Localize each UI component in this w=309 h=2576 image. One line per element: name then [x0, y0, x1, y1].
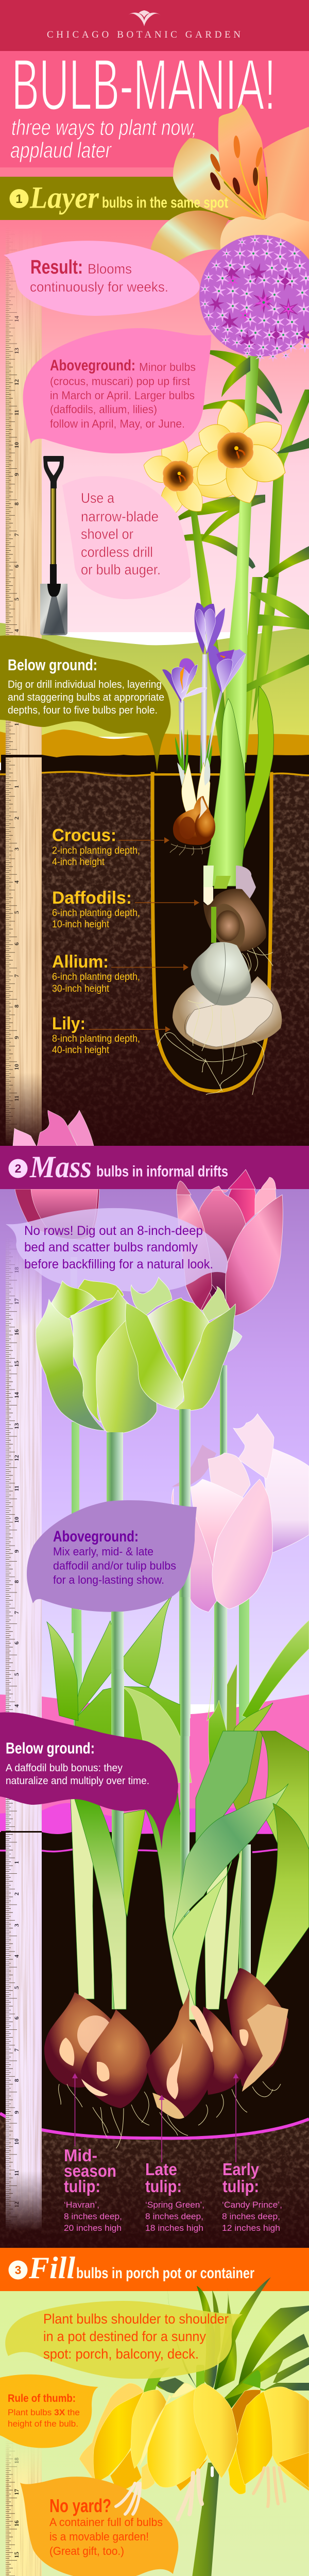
section 2 ruler: 14	[13, 1392, 20, 1398]
soil strip	[1, 755, 309, 776]
label: late tulip: 18 inches high	[145, 2223, 203, 2233]
section 2 ruler: 11	[13, 2170, 20, 2176]
callout: aboveground section 2	[27, 1500, 197, 1612]
icon: number 1	[9, 189, 29, 208]
callout: tools: or bulb auger.	[81, 562, 161, 578]
ruler: section 1: 9	[13, 473, 20, 476]
section 2 ruler: 6	[13, 2016, 20, 2020]
depth label: daffodils: 10-inch height	[52, 919, 110, 930]
daffodil flowers	[140, 399, 292, 519]
depth label: daffodils: Daffodils:	[52, 888, 132, 908]
section 2 ruler: 16	[13, 1329, 20, 1335]
section 2 ruler	[6, 1236, 42, 2231]
callout: aboveground section 1: (crocus, muscari) pop up first	[50, 375, 190, 387]
tulip: pink	[177, 1170, 283, 1316]
section 3 heading	[8, 2251, 254, 2285]
fritillaria bells	[79, 2383, 309, 2494]
callout: tools: Use a	[81, 490, 115, 506]
section 2 ruler: 18	[13, 1267, 20, 1273]
callout: rule of thumb: height of the bulb.	[8, 2419, 78, 2429]
callout: aboveground section 1: (daffodils, allium, lilies)	[50, 403, 157, 416]
ruler: section 1: 5	[13, 911, 20, 914]
crocus plants	[162, 603, 246, 824]
soil bowl	[0, 1831, 309, 2138]
callout: rule of thumb: Plant bulbs 3X the	[8, 2408, 80, 2417]
section 2 ruler: 10	[13, 2139, 20, 2145]
icon: number 2: 2	[15, 1162, 21, 1175]
section 2 ruler: 17	[13, 1298, 20, 1304]
section 2 ruler: 4	[13, 1955, 20, 1958]
callout: plant bulbs: in a pot destined for a sunny	[43, 2329, 206, 2344]
label: mid-season tulip: ‘Havran’,	[64, 2200, 99, 2210]
tulip: green left	[36, 1279, 157, 1433]
section 2 ruler: 10	[13, 1517, 20, 1523]
section 2 heading: bulbs in informal drifts	[96, 1163, 228, 1180]
tulip foliage	[47, 1594, 309, 1999]
section 1 header band	[0, 177, 309, 220]
allium flower head	[199, 234, 309, 362]
callout: below ground section 1: depths, four to five bulbs per hole.	[8, 705, 158, 716]
section 2 ruler: 7	[13, 1611, 20, 1614]
ground line on ruler 2	[1, 1831, 42, 1850]
ruler: section 1: 14	[13, 316, 20, 322]
section 2 ruler: 1	[13, 1861, 20, 1864]
fritillaria stamens	[178, 2468, 285, 2519]
callout: rule of thumb: Rule of thumb:	[8, 2393, 76, 2404]
section 3 ruler: 18	[13, 2458, 20, 2464]
stems crossing the callout	[111, 1597, 190, 1803]
callout: no rows: bed and scatter bulbs randomly	[24, 1240, 198, 1255]
depth label: daffodils: 6-inch planting depth,	[52, 908, 140, 919]
section 1 heading: Layer	[29, 180, 99, 214]
callout: no yard: (Great gift, too.)	[49, 2545, 124, 2557]
section 2 ruler: 8	[13, 2079, 20, 2082]
section 2 ruler: 7	[13, 2048, 20, 2052]
callout: aboveground section 2: Aboveground:	[53, 1528, 139, 1545]
tulip labels and pointers	[64, 2073, 282, 2233]
depth label: daffodils	[52, 888, 199, 930]
stems and leaves: layered planting	[165, 350, 309, 886]
callout: aboveground section 2: Mix early, mid- & late	[53, 1545, 153, 1558]
planting hole	[152, 774, 271, 1091]
bulb roots: lily and allium	[157, 1001, 264, 1095]
ruler: section 1: 12	[13, 379, 20, 385]
label: late tulip: 8 inches deep,	[145, 2211, 203, 2222]
label: early tulip: 12 inches high	[222, 2223, 280, 2233]
callout: tools: cordless drill	[81, 544, 153, 560]
crocus bloom: upper	[195, 603, 225, 654]
callout: plant bulbs: Plant bulbs shoulder to shoulder	[43, 2311, 229, 2327]
ruler: section 1: 13	[13, 348, 20, 354]
section 2 ruler: 12	[13, 1455, 20, 1461]
callout: no rows	[6, 1208, 228, 1292]
lily flower	[151, 104, 309, 273]
crocus bloom: right	[209, 646, 246, 693]
section 2 ruler: 11	[13, 1485, 20, 1492]
underground leaves	[75, 1731, 309, 2020]
section 2 ruler: 9	[13, 1550, 20, 1553]
label: late tulip: ‘Spring Green’,	[145, 2200, 204, 2210]
section 3 heading: bulbs in porch pot or container	[76, 2265, 254, 2282]
section 2 header band	[0, 1146, 309, 1189]
callout: no yard: A container full of bulbs	[49, 2516, 163, 2529]
callout: below ground section 1: and staggering bulbs at appropriate	[8, 692, 164, 703]
section 2 ruler: 15	[13, 1361, 20, 1367]
section 1 sky background	[0, 220, 309, 632]
section 3 ruler	[6, 2439, 42, 2576]
section 2 ruler: 13	[13, 1423, 20, 1429]
ground line on ruler	[1, 755, 42, 773]
callout: rule of thumb	[0, 2375, 98, 2448]
ruler: section 1: 1	[13, 723, 20, 726]
section 2 ruler: 3	[13, 1924, 20, 1927]
depth label: crocus: 2-inch planting depth,	[52, 845, 140, 856]
section 2 ruler: 5	[13, 1673, 20, 1676]
depth label: allium: 6-inch planting depth,	[52, 972, 140, 982]
label: early tulip: ‘Candy Prince’,	[222, 2200, 282, 2210]
callout: aboveground section 2: daffodil and/or tulip bulbs	[53, 1559, 176, 1572]
title panel background	[0, 51, 309, 177]
callout: no yard	[20, 2477, 178, 2576]
callout: below ground section 2: naturalize and multiply over time.	[6, 1775, 149, 1787]
callout: result	[4, 241, 200, 316]
callout: tools: shovel or	[81, 526, 133, 542]
ruler: section 1: 11	[13, 410, 20, 416]
tulip roots	[59, 2081, 281, 2148]
callout: plant bulbs	[5, 2301, 243, 2379]
label: mid-season tulip: 20 inches high	[64, 2223, 122, 2233]
section 2 sky background	[0, 1189, 309, 1704]
ruler: section 1: 3	[13, 848, 20, 851]
depth label: crocus: Crocus:	[52, 825, 116, 845]
top band with logo	[0, 0, 309, 51]
callout: aboveground section 1: Aboveground:	[50, 357, 135, 374]
bulb: lily	[173, 976, 282, 1049]
label: early tulip: Early	[222, 2160, 260, 2179]
section 2 ruler: 6	[13, 1641, 20, 1645]
label: mid-season tulip	[64, 2073, 122, 2233]
callout: aboveground section 1: Minor bulbs	[139, 361, 196, 374]
section 2 ruler: 12	[13, 2201, 20, 2208]
icon: garden logo	[128, 10, 161, 26]
icon: number 3	[8, 2261, 28, 2279]
ruler: section 1: 1	[13, 785, 20, 788]
callout: aboveground section 1	[23, 328, 211, 453]
bulb: allium	[191, 942, 251, 1006]
crocus bloom: left	[162, 658, 207, 703]
tulip tips over section 2 band	[177, 1170, 276, 1195]
stems: foreground tulips	[107, 1409, 191, 1718]
callout: result: Result:	[30, 257, 83, 278]
section 3 ruler: 17	[13, 2489, 20, 2495]
label: mid-season tulip: tulip:	[64, 2177, 100, 2196]
daffodil: rear bloom	[140, 431, 246, 519]
section 3 ruler: 15	[13, 2552, 20, 2558]
depth label: lily: 8-inch planting depth,	[52, 1033, 140, 1044]
section 2 heading	[8, 1150, 228, 1184]
section 3 ruler: 16	[13, 2520, 20, 2527]
callout: no yard: is a movable garden!	[49, 2530, 149, 2543]
callout: tools: narrow-blade	[81, 509, 159, 524]
callout: below ground section 1	[0, 635, 171, 772]
tulip: dark burgundy	[15, 1189, 99, 1240]
section 1 ground layers	[0, 623, 309, 1146]
callout: aboveground section 2: for a long-lasting show.	[53, 1573, 164, 1586]
callout: below ground section 1: Below ground:	[8, 656, 97, 674]
depth label: allium	[52, 952, 188, 994]
ruler: section 1: 8	[13, 502, 20, 505]
section 3 header and background	[0, 2248, 309, 2576]
ruler: section 1: 4	[13, 880, 20, 884]
label: early tulip: tulip:	[222, 2177, 259, 2196]
label: late tulip: tulip:	[145, 2177, 182, 2196]
soil background	[0, 770, 309, 1146]
depth label: lily	[52, 1014, 170, 1056]
section 3 heading: Fill	[28, 2251, 75, 2285]
label: mid-season tulip: Mid-	[64, 2146, 97, 2165]
subtitle: applaud later	[10, 138, 112, 163]
pink tulip tips above section 2 band	[13, 1110, 94, 1146]
ruler: section 1: 6	[13, 565, 20, 568]
callout: aboveground section 1: in March or April. Larger bulbs	[50, 389, 195, 402]
depth label: lily: 40-inch height	[52, 1045, 110, 1056]
tulip: light pink	[171, 1414, 309, 1612]
ruler: section 1: 6	[13, 942, 20, 945]
icon: number 3: 3	[15, 2263, 21, 2277]
callout: tools	[62, 476, 191, 599]
icon: number 2	[8, 1159, 28, 1178]
soil background section 2	[0, 1844, 309, 2248]
bulb: daffodil	[203, 866, 273, 979]
callout: no yard: No yard?	[49, 2495, 111, 2516]
section 2 ruler: 4	[13, 1704, 20, 1707]
subtitle	[10, 115, 197, 163]
icon: number 1: 1	[15, 192, 23, 206]
callout: result: continuously for weeks.	[30, 279, 168, 295]
organisation name: CHICAGO BOTANIC GARDEN	[47, 29, 241, 40]
ruler: section 1	[6, 227, 42, 1146]
fritillaria stem	[191, 2463, 220, 2576]
depth label: crocus: 4-inch height	[52, 857, 105, 868]
label: late tulip	[145, 2095, 204, 2233]
section 2 rear stems	[71, 1257, 249, 1803]
fritillaria upper leaves	[143, 2277, 309, 2411]
ruler: section 1: 10	[13, 442, 20, 448]
ruler: section 1: 4	[13, 629, 20, 632]
ruler: section 1: 10	[13, 1064, 20, 1070]
label: mid-season tulip: 8 inches deep,	[64, 2211, 122, 2222]
callout: no rows: No rows! Dig out an 8-inch-deep	[24, 1224, 203, 1238]
depth label: allium: Allium:	[52, 952, 109, 972]
tulip bulbs	[44, 1968, 288, 2119]
label: late tulip: Late	[145, 2160, 177, 2179]
ruler: section 1: 8	[13, 1005, 20, 1008]
callout: below ground section 2	[0, 1713, 178, 1850]
ruler: section 1: 11	[13, 1095, 20, 1101]
bulb: crocus	[170, 796, 215, 855]
callout: result: Blooms	[88, 261, 132, 277]
tulip: green right	[126, 1277, 242, 1411]
ruler: section 1: 9	[13, 1036, 20, 1039]
label: early tulip: 8 inches deep,	[222, 2211, 280, 2222]
section 1 heading	[9, 180, 228, 214]
ruler: section 1: 7	[13, 974, 20, 977]
callout: plant bulbs: spot: porch, balcony, deck.	[43, 2346, 199, 2362]
daffodil: front bloom	[187, 399, 292, 507]
callout: no rows: before backfilling for a natural look.	[24, 1257, 213, 1272]
section 2 ruler: 9	[13, 2111, 20, 2114]
section 2 ground layers	[0, 1694, 309, 2248]
ruler: section 1: 7	[13, 533, 20, 536]
icon: shovel	[40, 456, 67, 635]
stamens over no yard callout	[116, 2483, 140, 2514]
section 2 ruler: 8	[13, 1580, 20, 1583]
section 1 heading: bulbs in the same spot	[102, 194, 228, 211]
callout: below ground section 2: A daffodil bulb bonus: they	[6, 1762, 123, 1774]
ruler: section 1: 2	[13, 817, 20, 820]
section 2 ruler: 5	[13, 1986, 20, 1989]
callout: aboveground section 1: follow in April, May, or June.	[50, 417, 185, 430]
depth label: lily: Lily:	[52, 1014, 85, 1033]
label: early tulip	[222, 2073, 282, 2233]
callout: below ground section 1: Dig or drill individual holes, layering	[8, 679, 162, 690]
label: mid-season tulip: season	[64, 2161, 116, 2180]
depth label: allium: 30-inch height	[52, 984, 110, 994]
section 2 ruler: 2	[13, 1892, 20, 1895]
callout: below ground section 2: Below ground:	[6, 1739, 95, 1757]
section 2 heading: Mass	[29, 1150, 92, 1184]
ruler: section 1: 5	[13, 598, 20, 601]
subtitle: three ways to plant now,	[11, 115, 197, 140]
depth label: crocus	[52, 825, 169, 868]
